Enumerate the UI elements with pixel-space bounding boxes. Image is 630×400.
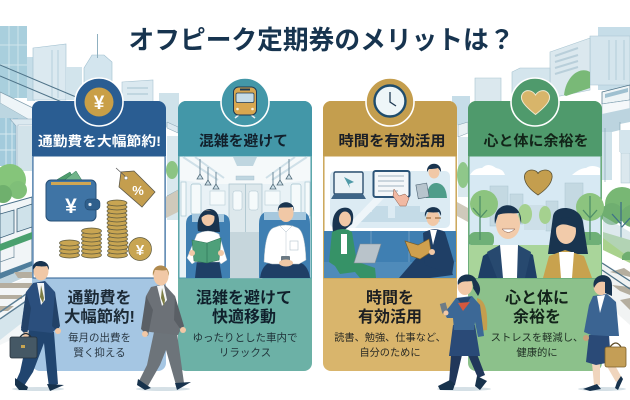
- subheading: 有効活用: [358, 308, 422, 326]
- description: ゆったりとした車内で: [192, 331, 298, 344]
- description: 健康的に: [516, 346, 558, 359]
- header band: [323, 101, 457, 156]
- panel background: [178, 101, 312, 371]
- tablet document icon: [374, 171, 410, 206]
- header band: [468, 101, 602, 156]
- icon: gold bag: [605, 343, 626, 367]
- icon: yen coin small: ¥: [136, 242, 145, 259]
- illustration: park scene: [469, 156, 604, 278]
- heading: 時間を有効活用: [338, 133, 446, 150]
- tree right: [605, 187, 630, 221]
- person: woman in blazer with bag: [578, 275, 626, 391]
- description: リラックス: [219, 347, 271, 359]
- background: right cityscape and railway: [452, 27, 630, 325]
- icon: percent price tag: [116, 168, 155, 207]
- subheading: 時間を: [366, 289, 414, 307]
- icon: wallet: ¥: [65, 195, 77, 218]
- illustration: train seats with commuters: [324, 156, 456, 278]
- subheading: 快適移動: [212, 307, 276, 326]
- panel: use time effectively: [323, 78, 457, 371]
- person: businessman with briefcase: [10, 261, 64, 391]
- illustration: train interior: [179, 156, 311, 278]
- description: 読書、勉強、仕事など、: [334, 331, 446, 344]
- subheading: 大幅節約!: [64, 307, 135, 326]
- icon: gold heart: [524, 170, 552, 195]
- description: 毎月の出費を: [68, 331, 131, 344]
- heading: 通勤費を大幅節約!: [38, 133, 161, 149]
- commuter: man with book: [399, 207, 454, 278]
- heading: 心と体に余裕を: [484, 133, 588, 150]
- title: オフピーク定期券のメリットは？: [128, 25, 514, 55]
- icon: coin stacks: [60, 200, 152, 260]
- panel: avoid congestion: [178, 78, 312, 371]
- panel: commuting cost savings: [32, 78, 166, 371]
- subheading: 混雑を避けて: [196, 288, 292, 307]
- person: smiling woman: [543, 208, 592, 278]
- background: left cityscape and railway: [0, 26, 179, 345]
- seats: [186, 214, 230, 278]
- tree cut: [0, 164, 26, 196]
- passenger: woman reading: [187, 209, 227, 278]
- icon: yen coin: [75, 78, 123, 126]
- icon: briefcase: [10, 334, 37, 358]
- subheading: 余裕を: [513, 308, 561, 326]
- panel background: [323, 101, 457, 371]
- panel background: [32, 101, 166, 371]
- panel background: [468, 101, 602, 371]
- icon: wallet: [46, 171, 100, 221]
- icon: yen coin: ¥: [94, 93, 105, 114]
- laptop icon: [331, 172, 366, 199]
- description: 自分のために: [359, 346, 421, 359]
- icon: heart badge: [511, 78, 559, 126]
- icon: clock: [366, 78, 414, 126]
- commuter: woman with laptop: [329, 208, 381, 278]
- header band: [32, 101, 166, 156]
- icon: train: [221, 78, 269, 126]
- person: smiling man: [478, 205, 537, 278]
- header band: [178, 101, 312, 156]
- subheading: 通勤費を: [67, 288, 132, 307]
- subheading: 心と体に: [505, 289, 569, 307]
- student with tablet: [416, 164, 447, 199]
- person: schoolgirl with phone: [437, 274, 491, 391]
- description: ストレスを軽減し、: [491, 331, 583, 344]
- heading: 混雑を避けて: [199, 132, 288, 150]
- person: businessman in grey suit: [136, 266, 191, 391]
- icon: percent price tag: %: [132, 183, 144, 198]
- passenger: man with phone: [260, 202, 310, 278]
- illustration area: [33, 156, 165, 278]
- description: 賢く抑える: [73, 346, 126, 359]
- panel: room in mind and body: [468, 78, 604, 371]
